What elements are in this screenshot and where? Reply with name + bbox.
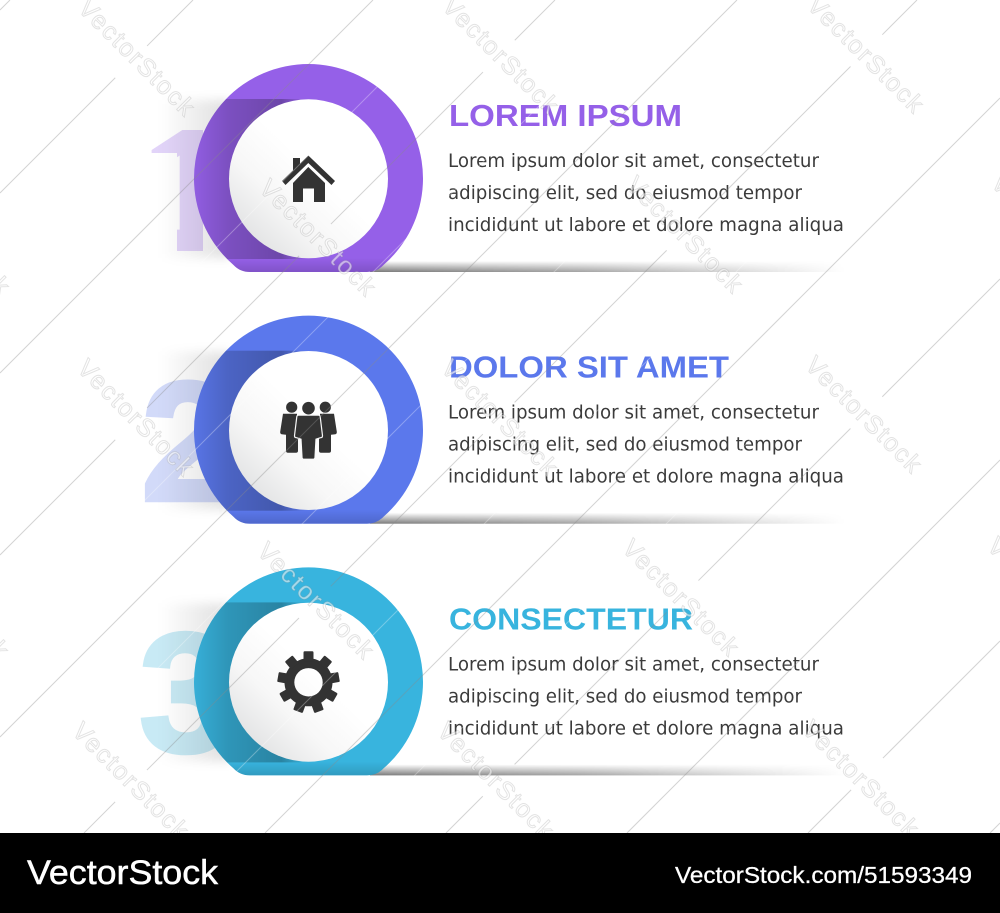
floor shadow — [370, 261, 845, 272]
body text: incididunt ut labore et dolore magna aliqua — [448, 466, 844, 488]
watermark tiles: VectorStock — [617, 534, 744, 662]
row 2: dolor sit amet — [141, 316, 845, 537]
shadow behind ring — [160, 352, 230, 510]
body text: adipiscing elit, sed do eiusmod tempor — [448, 685, 802, 707]
digit 1: 1 — [142, 96, 237, 286]
white disc — [229, 603, 388, 762]
body text: incididunt ut labore et dolore magna aliqua — [448, 214, 844, 236]
watermark tiles: VectorStock — [67, 717, 194, 845]
white disc — [229, 351, 388, 510]
floor shadow — [370, 513, 845, 524]
heading: DOLOR SIT AMET — [449, 350, 729, 385]
body text — [448, 653, 844, 739]
ring shading — [196, 602, 386, 776]
heading: CONSECTETUR — [449, 601, 693, 636]
watermark tiles: VectorStock — [432, 717, 559, 845]
row 1: lorem ipsum — [142, 64, 845, 286]
body text: adipiscing elit, sed do eiusmod tempor — [448, 182, 802, 204]
footer bar — [0, 833, 1000, 913]
body text: incididunt ut labore et dolore magna aliqua — [448, 717, 844, 739]
watermark tiles: VectorStock — [797, 715, 924, 843]
body text: Lorem ipsum dolor sit amet, consectetur — [448, 150, 819, 172]
white disc — [229, 99, 388, 258]
body text: adipiscing elit, sed do eiusmod tempor — [448, 434, 802, 456]
ring shading — [196, 350, 386, 524]
footer image id: VectorStock.com/51593349 — [675, 862, 972, 888]
ring — [194, 64, 423, 272]
body text — [448, 402, 844, 488]
icon: gear — [277, 651, 340, 713]
heading: LOREM IPSUM — [449, 98, 682, 133]
digit 3: 3 — [139, 598, 234, 788]
body text: Lorem ipsum dolor sit amet, consectetur — [448, 402, 819, 424]
ring — [194, 316, 423, 524]
watermark tiles: VectorStock — [436, 354, 563, 482]
row 3: consectetur — [139, 567, 845, 788]
icon: house — [282, 156, 335, 202]
digit 2: 2 — [141, 347, 236, 537]
watermark tiles: VectorStock — [254, 174, 381, 302]
body text — [448, 150, 844, 236]
body text: Lorem ipsum dolor sit amet, consectetur — [448, 653, 819, 675]
icon: people — [280, 402, 337, 459]
floor shadow — [370, 764, 845, 775]
watermark tiles: VectorStock — [72, 354, 199, 482]
watermark tiles: VectorStock — [621, 171, 748, 299]
ring shading — [196, 99, 386, 272]
footer logo text: VectorStock — [27, 854, 219, 892]
shadow behind ring — [160, 603, 230, 761]
watermark tiles: VectorStock — [800, 351, 927, 479]
watermark tiles: VectorStock — [252, 537, 379, 665]
shadow behind ring — [160, 100, 230, 258]
ring — [194, 567, 423, 775]
